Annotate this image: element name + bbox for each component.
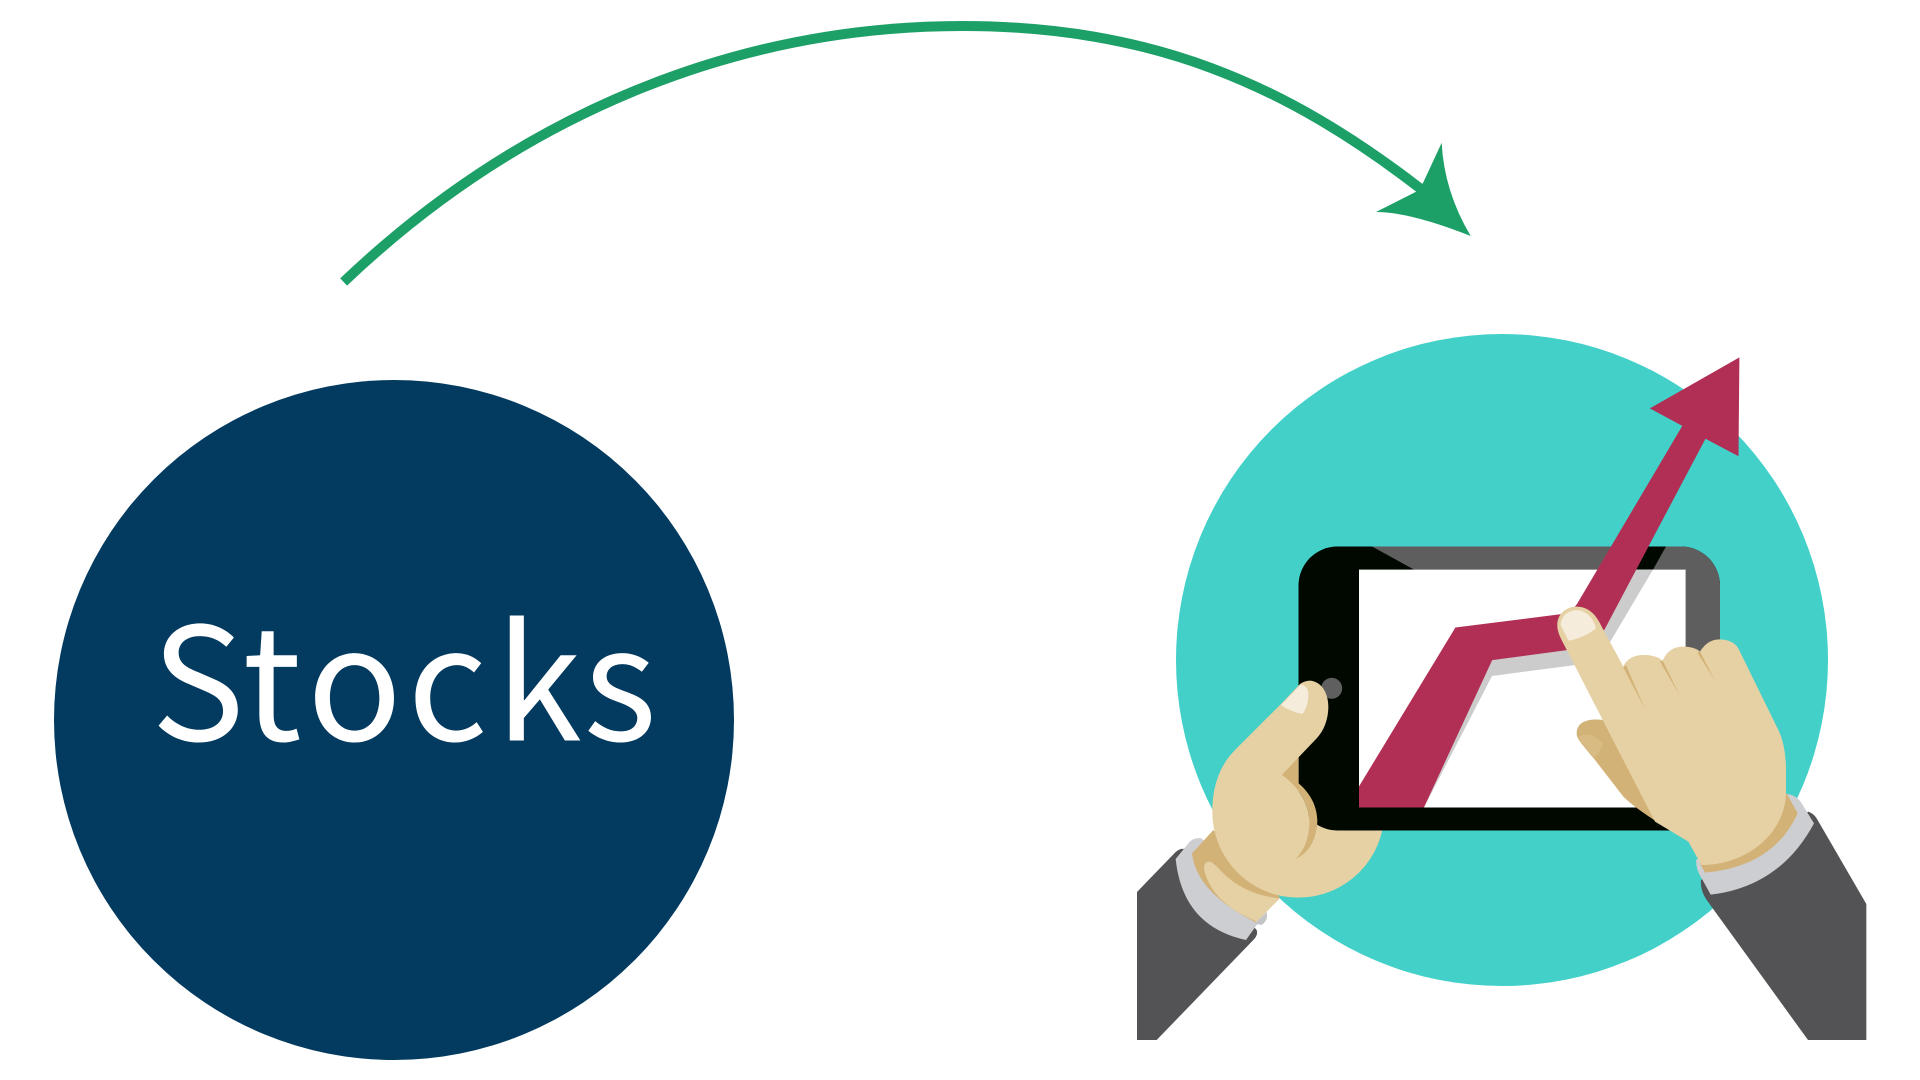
panel: stocks circle (54, 380, 734, 1060)
icon: right sleeve and cuff (1696, 793, 1866, 1040)
curved arrow: stocks to growth (344, 26, 1471, 282)
icon: tablet body (1298, 546, 1720, 830)
panel: tablet growth illustration (1137, 334, 1866, 1040)
title: Stocks: Stocks (151, 560, 657, 786)
icon: right hand pointing (1557, 607, 1786, 865)
teal background circle (1176, 334, 1828, 986)
icon: red rising arrow (1359, 357, 1739, 808)
icon: left hand holding tablet (1212, 681, 1328, 897)
icon: left sleeve and cuff (1137, 726, 1384, 1040)
